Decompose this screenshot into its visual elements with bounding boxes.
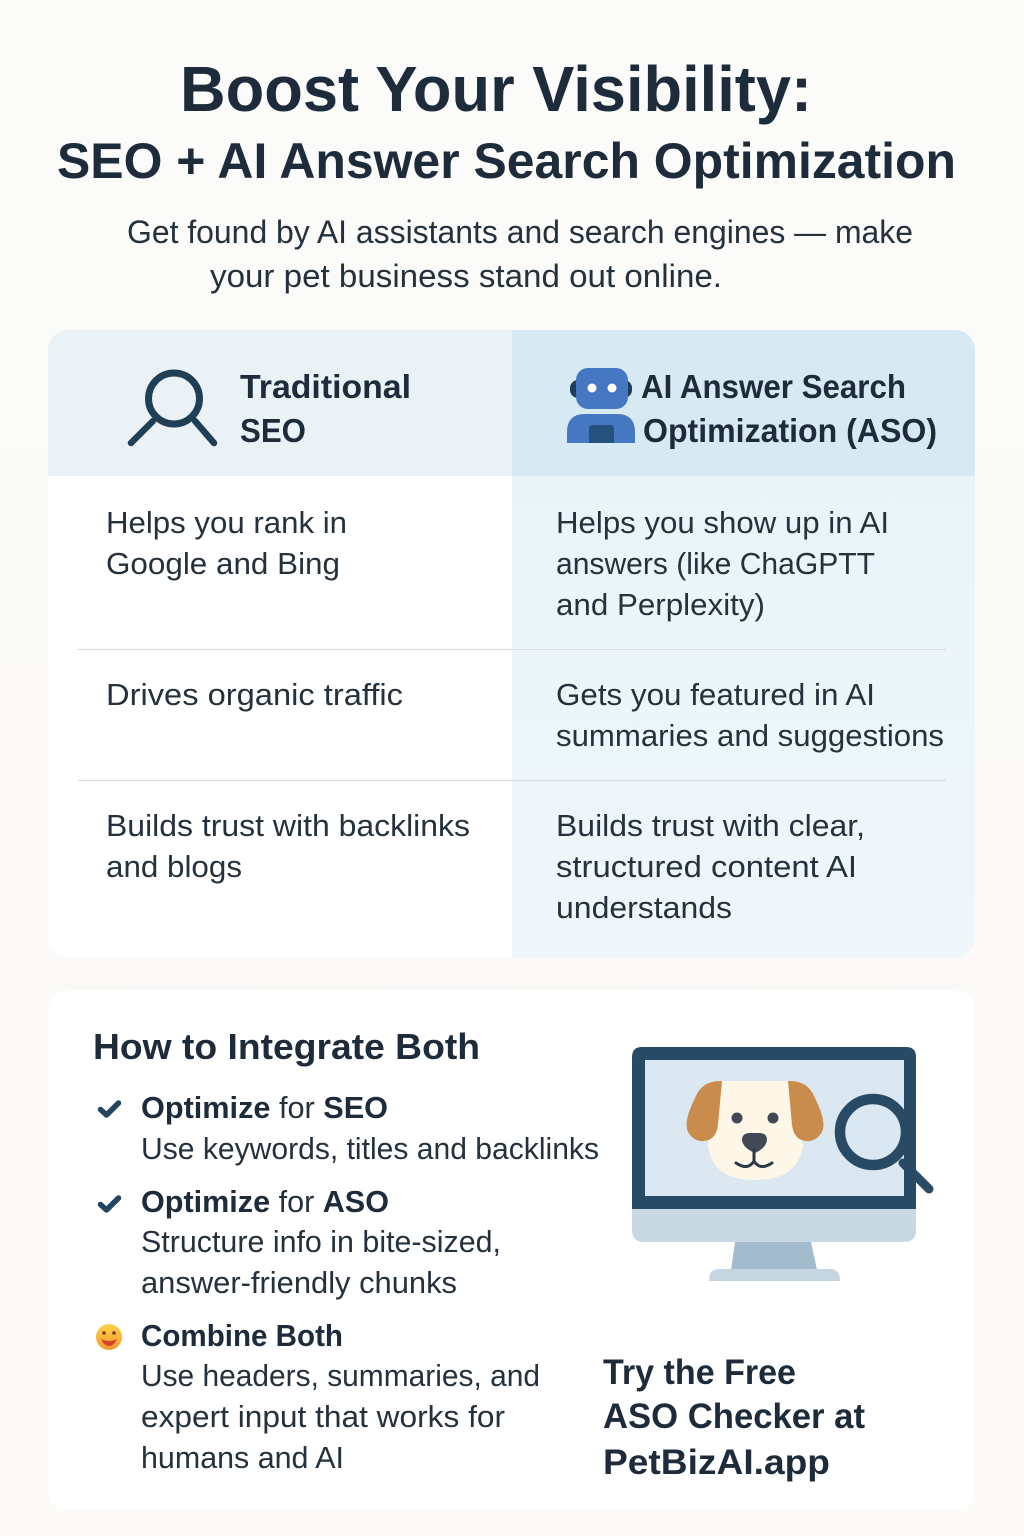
row 2 right: summaries and suggestions	[556, 718, 944, 753]
item: combine both: expert input that works for	[141, 1399, 505, 1434]
row 2 left: Drives organic traffic	[106, 677, 403, 712]
icon: check mark 2	[100, 1198, 118, 1210]
title: Boost Your Visibility:	[180, 53, 812, 125]
row 3 left	[106, 808, 470, 884]
title	[57, 53, 956, 189]
row 3 left: and blogs	[106, 849, 242, 884]
row 3 left: Builds trust with backlinks	[106, 808, 470, 843]
heading: Traditional SEO	[240, 368, 411, 449]
row 1 left	[106, 505, 347, 581]
item: combine both: Combine Both	[141, 1318, 343, 1353]
item: optimize for ASO: Structure info in bite-sized,	[141, 1224, 501, 1259]
heading: Traditional SEO: Traditional	[240, 368, 411, 405]
intro text	[127, 214, 913, 294]
illustration: monitor with dog and magnifier	[632, 1047, 929, 1281]
intro text: Get found by AI assistants and search engines — make	[127, 214, 913, 250]
item: combine both: humans and AI	[141, 1440, 344, 1475]
heading: how to integrate both: How to Integrate Both	[93, 1026, 480, 1067]
item: combine both: Use headers, summaries, and	[141, 1358, 540, 1393]
icon: check mark 1	[100, 1103, 118, 1115]
item: optimize for ASO	[141, 1184, 501, 1300]
icon: robot	[567, 368, 635, 443]
row 3 right: Builds trust with clear,	[556, 808, 865, 843]
icon: magnifying glass	[131, 373, 214, 443]
row 1 left: Helps you rank in	[106, 505, 347, 540]
heading: Traditional SEO: SEO	[240, 412, 306, 449]
dog face	[687, 1081, 823, 1180]
panel: how to integrate both	[48, 991, 975, 1510]
heading: AI Answer Search Optimization: AI Answer Search	[641, 368, 906, 405]
row 2 right: Gets you featured in AI	[556, 677, 875, 712]
heading: AI Answer Search Optimization	[641, 368, 937, 449]
row 2 right	[556, 677, 944, 753]
call to action: ASO Checker at	[603, 1397, 865, 1436]
icon: smiling face	[96, 1324, 122, 1350]
call to action	[603, 1353, 865, 1482]
item: optimize for SEO: Optimize for SEO	[141, 1090, 388, 1125]
row 1 left: Google and Bing	[106, 546, 340, 581]
item: optimize for ASO: answer-friendly chunks	[141, 1265, 457, 1300]
row 3 right: structured content AI	[556, 849, 857, 884]
row 1 right: and Perplexity)	[556, 587, 765, 622]
call to action: PetBizAI.app	[603, 1443, 830, 1482]
item: optimize for SEO: Use keywords, titles and backlinks	[141, 1131, 599, 1166]
item: combine both	[141, 1318, 540, 1475]
item: optimize for SEO	[141, 1090, 599, 1166]
row 3 right: understands	[556, 890, 732, 925]
intro text: your pet business stand out online.	[210, 258, 722, 294]
row 1 right: answers (like ChaGPTT	[556, 546, 875, 581]
magnifier	[840, 1099, 929, 1189]
heading: AI Answer Search Optimization: Optimization (ASO)	[643, 412, 937, 449]
row 3 right	[556, 808, 865, 925]
item: optimize for ASO: Optimize for ASO	[141, 1184, 389, 1219]
row 1 right: Helps you show up in AI	[556, 505, 889, 540]
row 1 right	[556, 505, 889, 622]
panel: comparison table	[48, 330, 975, 958]
title: SEO + AI Answer Search Optimization	[57, 133, 956, 189]
call to action: Try the Free	[603, 1353, 796, 1392]
